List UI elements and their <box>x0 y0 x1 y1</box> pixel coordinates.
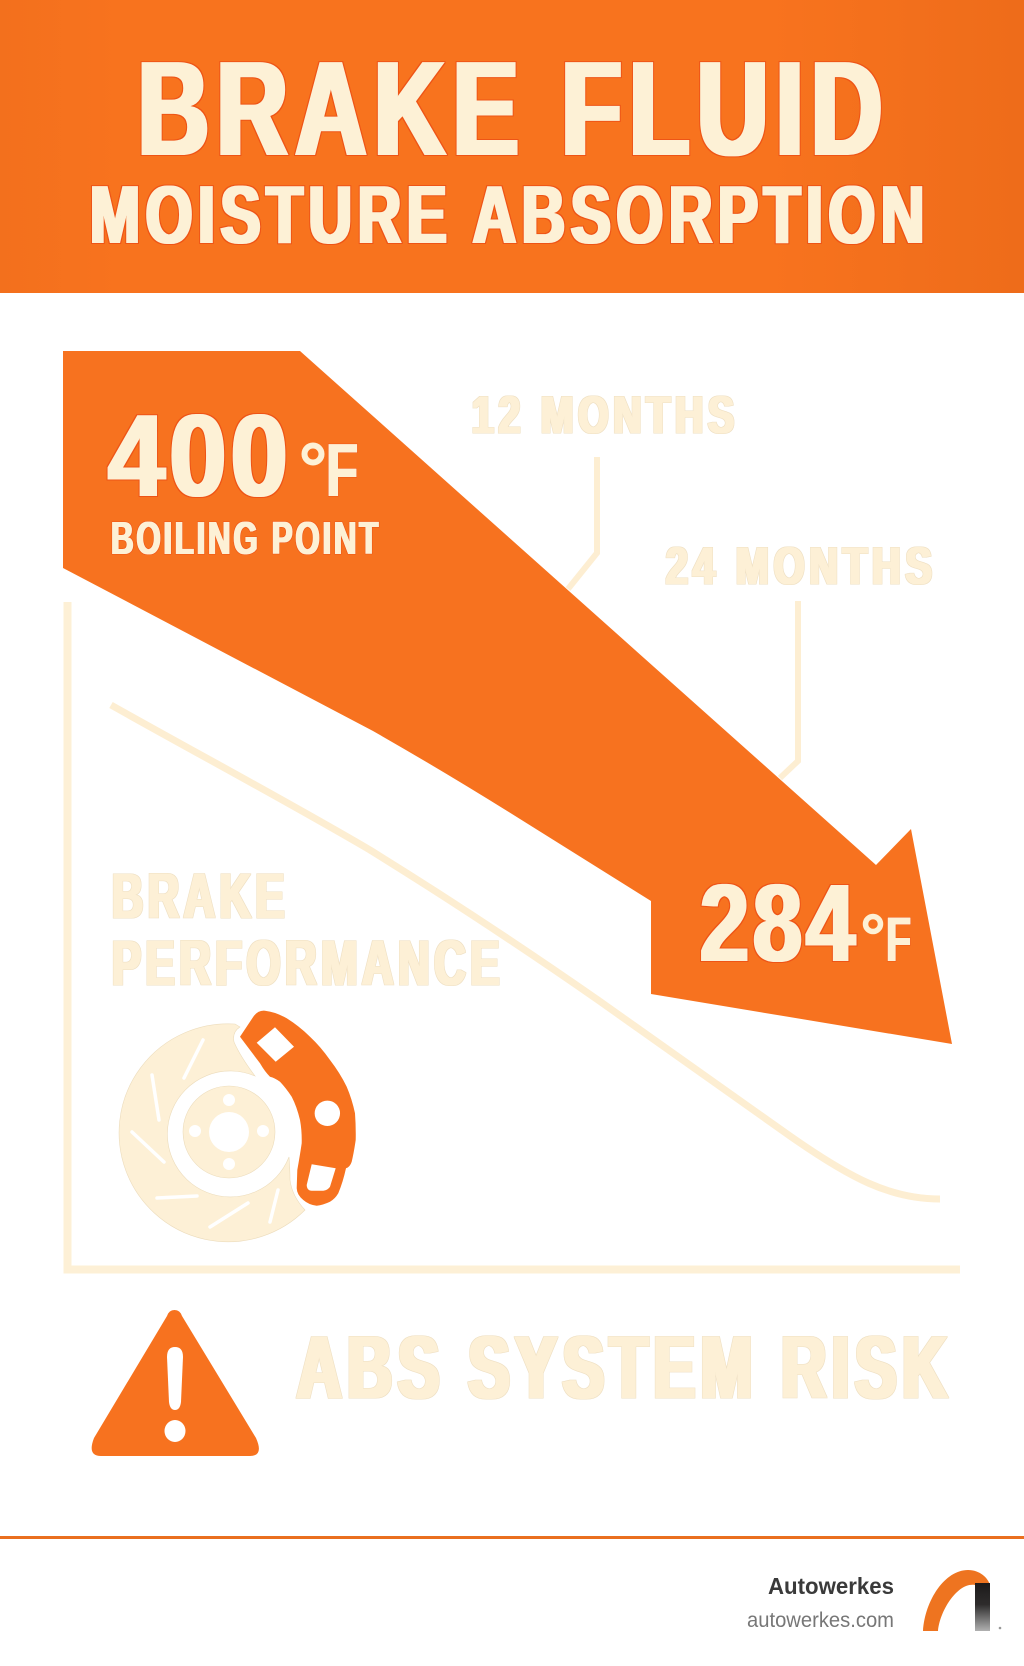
footer brand text: Autowerkes <box>768 1573 894 1599</box>
stat: 400 degrees F boiling point: BOILING POINT <box>111 512 381 564</box>
stat: 400 degrees F boiling point: F <box>326 428 358 512</box>
brake caliper <box>240 1011 356 1206</box>
stat: 284 degrees F: 284 <box>700 862 859 985</box>
panel: header banner <box>0 0 1024 293</box>
icon: warning triangle <box>92 1310 259 1456</box>
footer brand text <box>747 1573 894 1632</box>
brake disc <box>119 1024 305 1242</box>
label: 12 months: 12 MONTHS <box>472 386 739 445</box>
label: 24 months: 24 MONTHS <box>666 537 937 596</box>
label: brake performance: PERFORMANCE <box>112 927 504 999</box>
icon: brake disc and caliper <box>119 1011 356 1242</box>
leader line: 12 months <box>568 457 597 589</box>
leader line: 24 months <box>780 601 798 778</box>
stat: 284 degrees F: F <box>886 905 911 975</box>
chart axes <box>68 602 960 1270</box>
label: brake performance: BRAKE <box>112 860 289 932</box>
stat: 400 degrees F boiling point <box>108 390 381 564</box>
chart: brake performance curve <box>111 705 940 1199</box>
footer rule <box>0 1536 1024 1539</box>
stat: 400 degrees F boiling point: 400 <box>108 390 292 521</box>
footer brand text: autowerkes.com <box>747 1609 894 1632</box>
arrow: falling boiling point <box>63 351 952 1044</box>
icon: Autowerkes logo <box>923 1570 1001 1631</box>
label: brake performance <box>112 860 504 999</box>
